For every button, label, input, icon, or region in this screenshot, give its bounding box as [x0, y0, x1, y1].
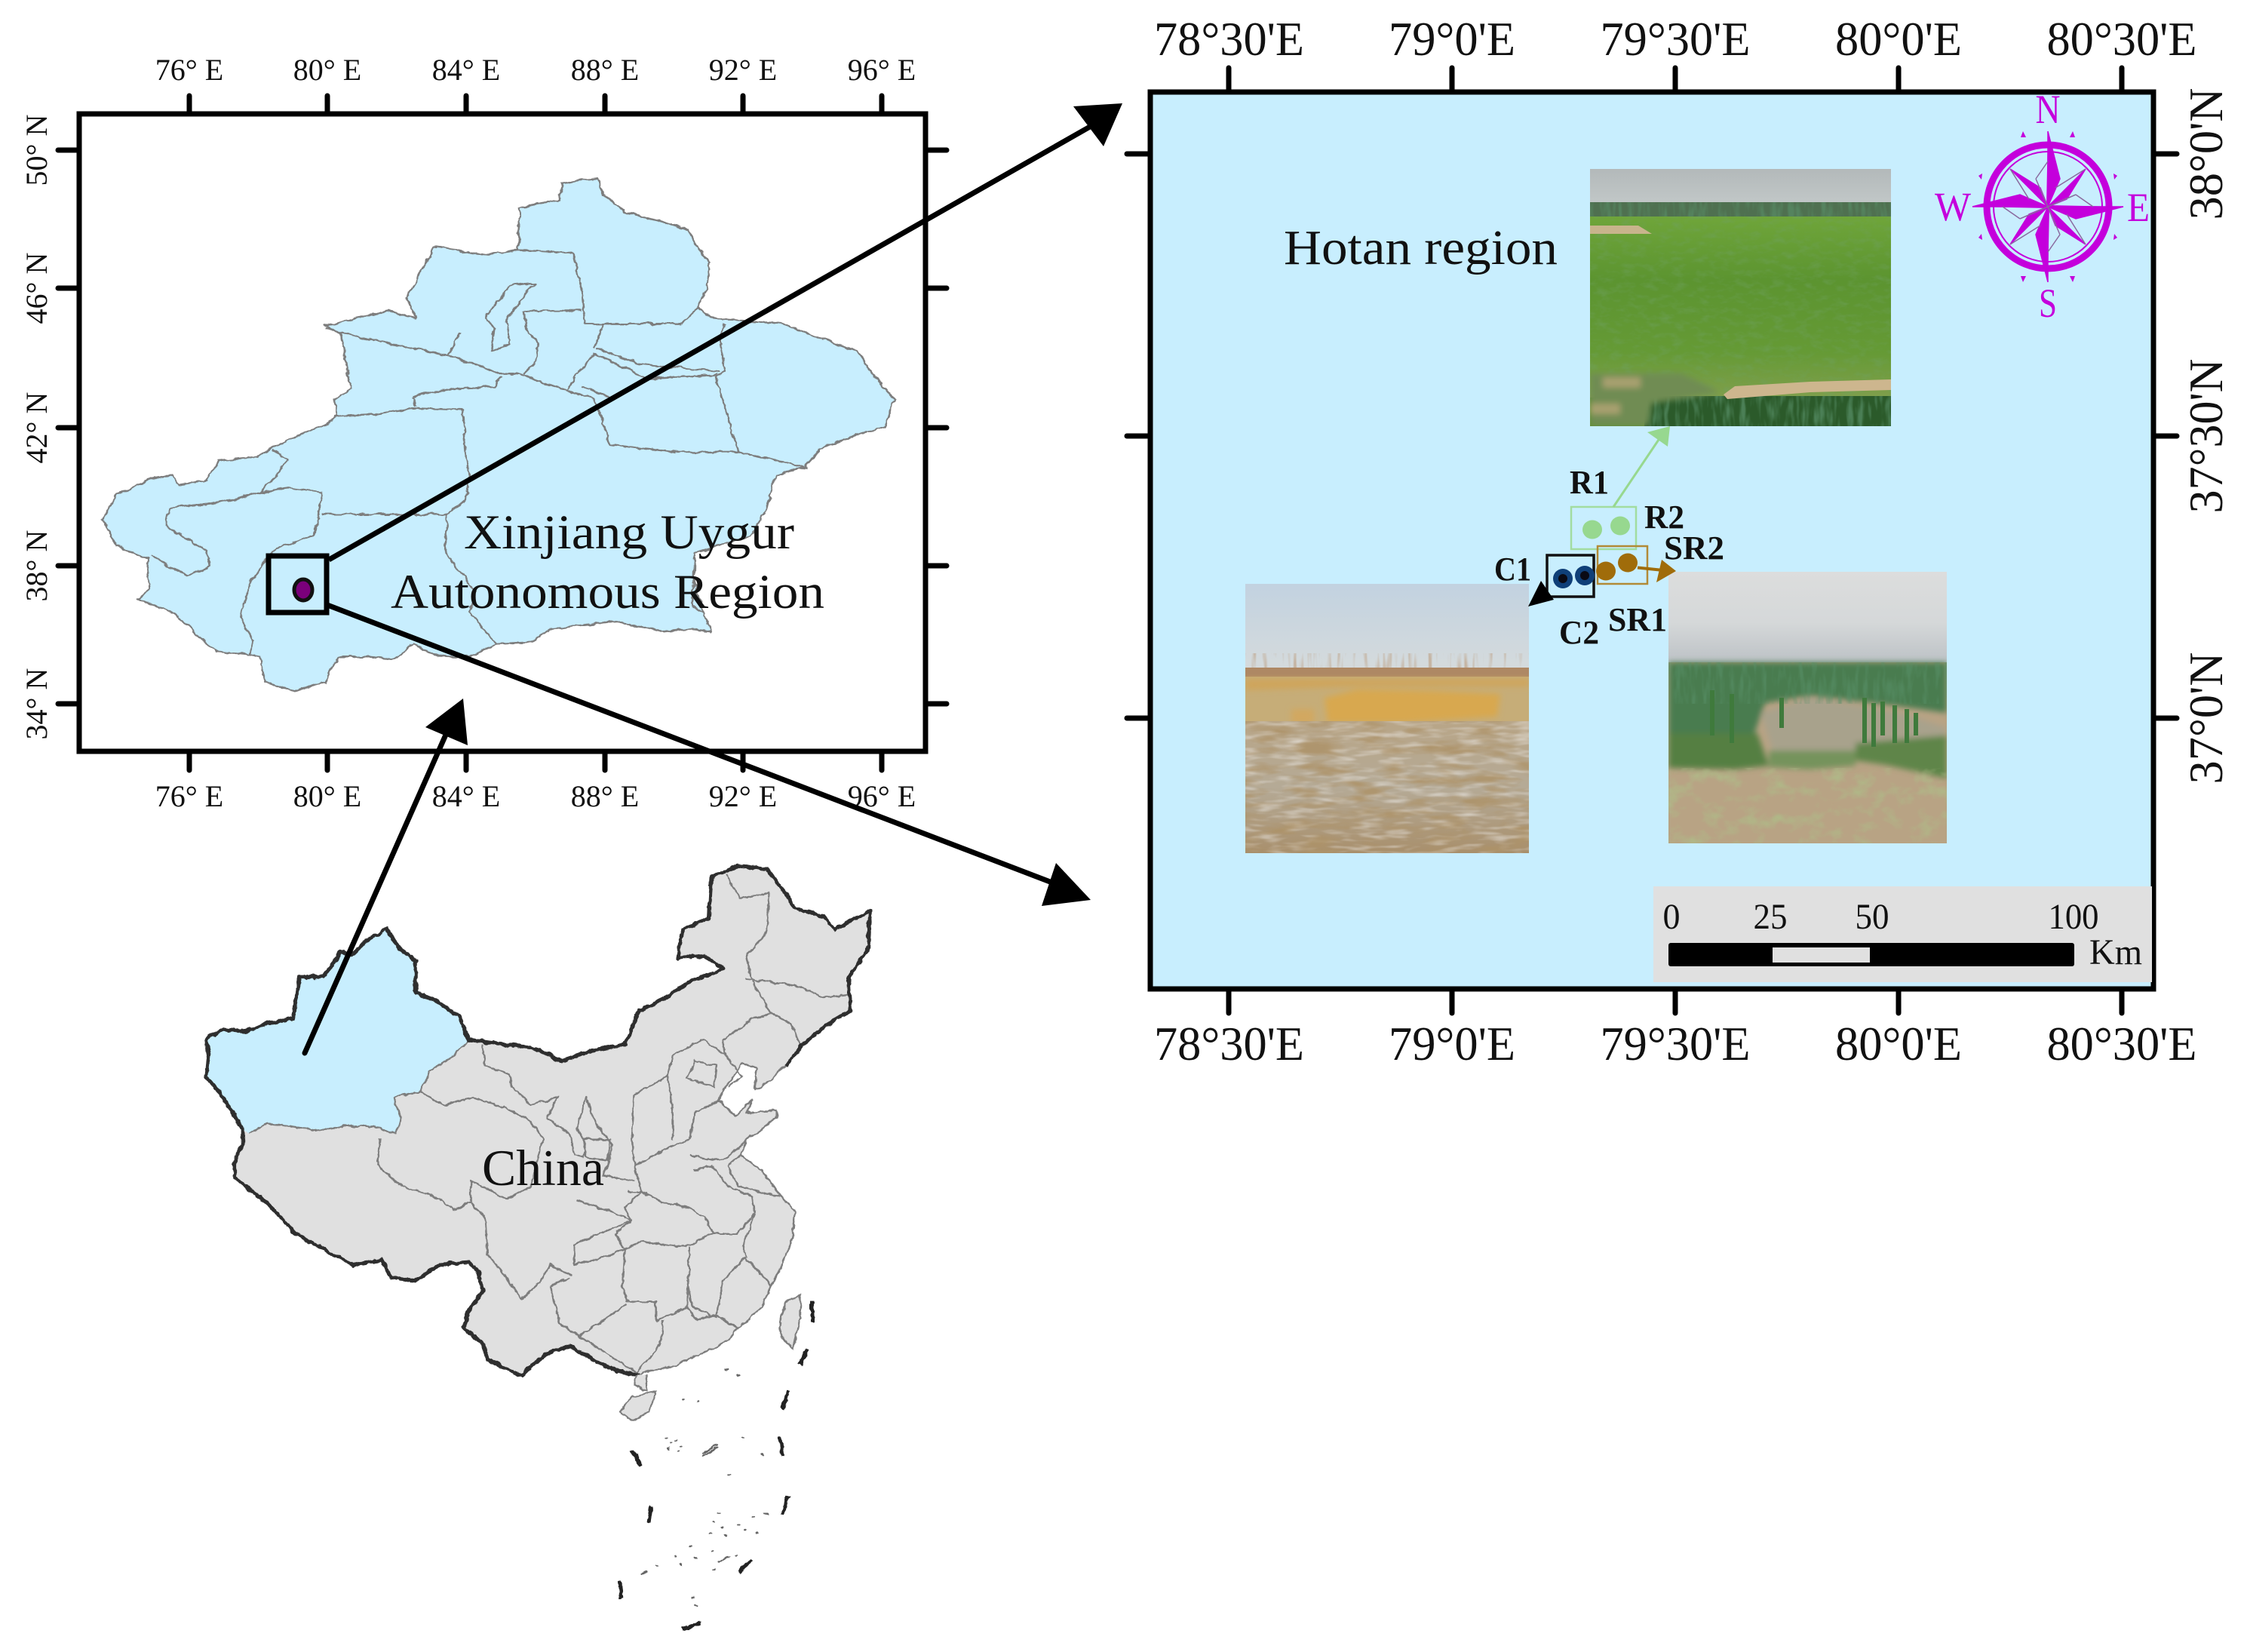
region label: Xinjiang Uygur [464, 505, 794, 560]
site group C (saline land) [1528, 555, 1595, 606]
site labels [1494, 464, 1724, 651]
top longitude labels: 92° E [709, 53, 777, 87]
latitude labels: 37°30'N [2179, 359, 2233, 513]
Xinjiang region map [103, 178, 895, 691]
top longitude labels [155, 53, 916, 87]
latitude labels: 42° N [20, 392, 54, 463]
icon: compass rose [1935, 87, 2150, 326]
top longitude labels: 84° E [432, 53, 500, 87]
latitude labels: 38° N [20, 530, 54, 601]
site group SR (saline farmland) [1596, 546, 1676, 584]
bottom longitude labels [155, 779, 916, 813]
icon: compass rose: N [2035, 87, 2061, 132]
map frame [79, 114, 926, 751]
top longitude labels: 96° E [848, 53, 916, 87]
Hainan [620, 1375, 656, 1421]
bottom longitude labels [1154, 1017, 2196, 1070]
panel: China map [206, 865, 870, 1629]
bottom longitude labels: 78°30'E [1154, 1017, 1304, 1070]
latitude labels: 34° N [20, 668, 54, 739]
photo: saline land [1245, 584, 1529, 853]
scale bar: 100 [2049, 897, 2098, 937]
latitude labels [20, 115, 54, 739]
site labels: C1 [1494, 551, 1531, 588]
top longitude labels: 88° E [571, 53, 639, 87]
site labels: SR1 [1608, 601, 1667, 638]
icon: compass rose: S [2039, 281, 2057, 326]
scale bar: 50 [1856, 897, 1889, 937]
China land [206, 865, 870, 1375]
arrow: Xinjiang box to Hotan map top [329, 103, 1122, 560]
photo: maize field with salinised soil [1668, 572, 1947, 843]
arrow: Xinjiang box to Hotan map bottom [327, 605, 1091, 906]
region label [391, 505, 824, 619]
top longitude labels: 80° E [293, 53, 361, 87]
site group R (paddy) [1571, 426, 1670, 549]
axis ticks [1127, 68, 2177, 1013]
panel: Hotan region map [1127, 12, 2233, 1070]
latitude labels: 46° N [20, 253, 54, 324]
top longitude labels: 78°30'E [1154, 12, 1304, 66]
scale bar: 25 [1753, 897, 1788, 937]
panel: Xinjiang locator map [20, 53, 947, 813]
top longitude labels: 79°30'E [1601, 12, 1750, 66]
arrow: China map to Xinjiang map [305, 699, 468, 1053]
site labels: SR2 [1664, 530, 1724, 567]
site labels: R2 [1644, 499, 1684, 536]
top longitude labels: 80°30'E [2047, 12, 2196, 66]
region label: Autonomous Region [391, 565, 824, 619]
top longitude labels: 80°0'E [1835, 12, 1962, 66]
icon: compass rose: E [2127, 185, 2150, 230]
bottom longitude labels: 96° E [848, 779, 916, 813]
national border [206, 865, 870, 1375]
scale bar: 0 [1662, 897, 1681, 937]
bottom longitude labels: 92° E [709, 779, 777, 813]
scale bar: Km [2089, 932, 2142, 972]
bottom longitude labels: 79°0'E [1389, 1017, 1515, 1070]
region title: Hotan region [1284, 220, 1558, 275]
bottom longitude labels: 84° E [432, 779, 500, 813]
latitude labels: 38°0'N [2179, 88, 2233, 220]
China label: China [482, 1139, 604, 1196]
scale bar [1653, 886, 2152, 982]
latitude labels: 50° N [20, 115, 54, 186]
site labels: C2 [1559, 614, 1599, 651]
top longitude labels [1154, 12, 2196, 66]
bottom longitude labels: 80°30'E [2047, 1017, 2196, 1070]
bottom longitude labels: 88° E [571, 779, 639, 813]
province boundaries [250, 874, 849, 1373]
site labels: R1 [1570, 464, 1609, 501]
Taiwan [778, 1295, 800, 1349]
latitude labels: 37°0'N [2179, 652, 2233, 785]
bottom longitude labels: 76° E [155, 779, 223, 813]
icon: compass rose: W [1935, 184, 1971, 229]
bottom longitude labels: 80° E [293, 779, 361, 813]
top longitude labels: 76° E [155, 53, 223, 87]
bottom longitude labels: 80°0'E [1835, 1017, 1962, 1070]
latitude labels [2179, 88, 2233, 785]
top longitude labels: 79°0'E [1389, 12, 1515, 66]
axis ticks [58, 96, 947, 770]
map background and frame [1150, 92, 2153, 989]
bottom longitude labels: 79°30'E [1601, 1017, 1750, 1070]
South China Sea islands [642, 1370, 769, 1605]
South China Sea dashed boundary [620, 1302, 812, 1629]
study area marker box [269, 556, 327, 613]
photo: green rice field [1590, 169, 1891, 426]
Xinjiang highlight [206, 929, 468, 1134]
